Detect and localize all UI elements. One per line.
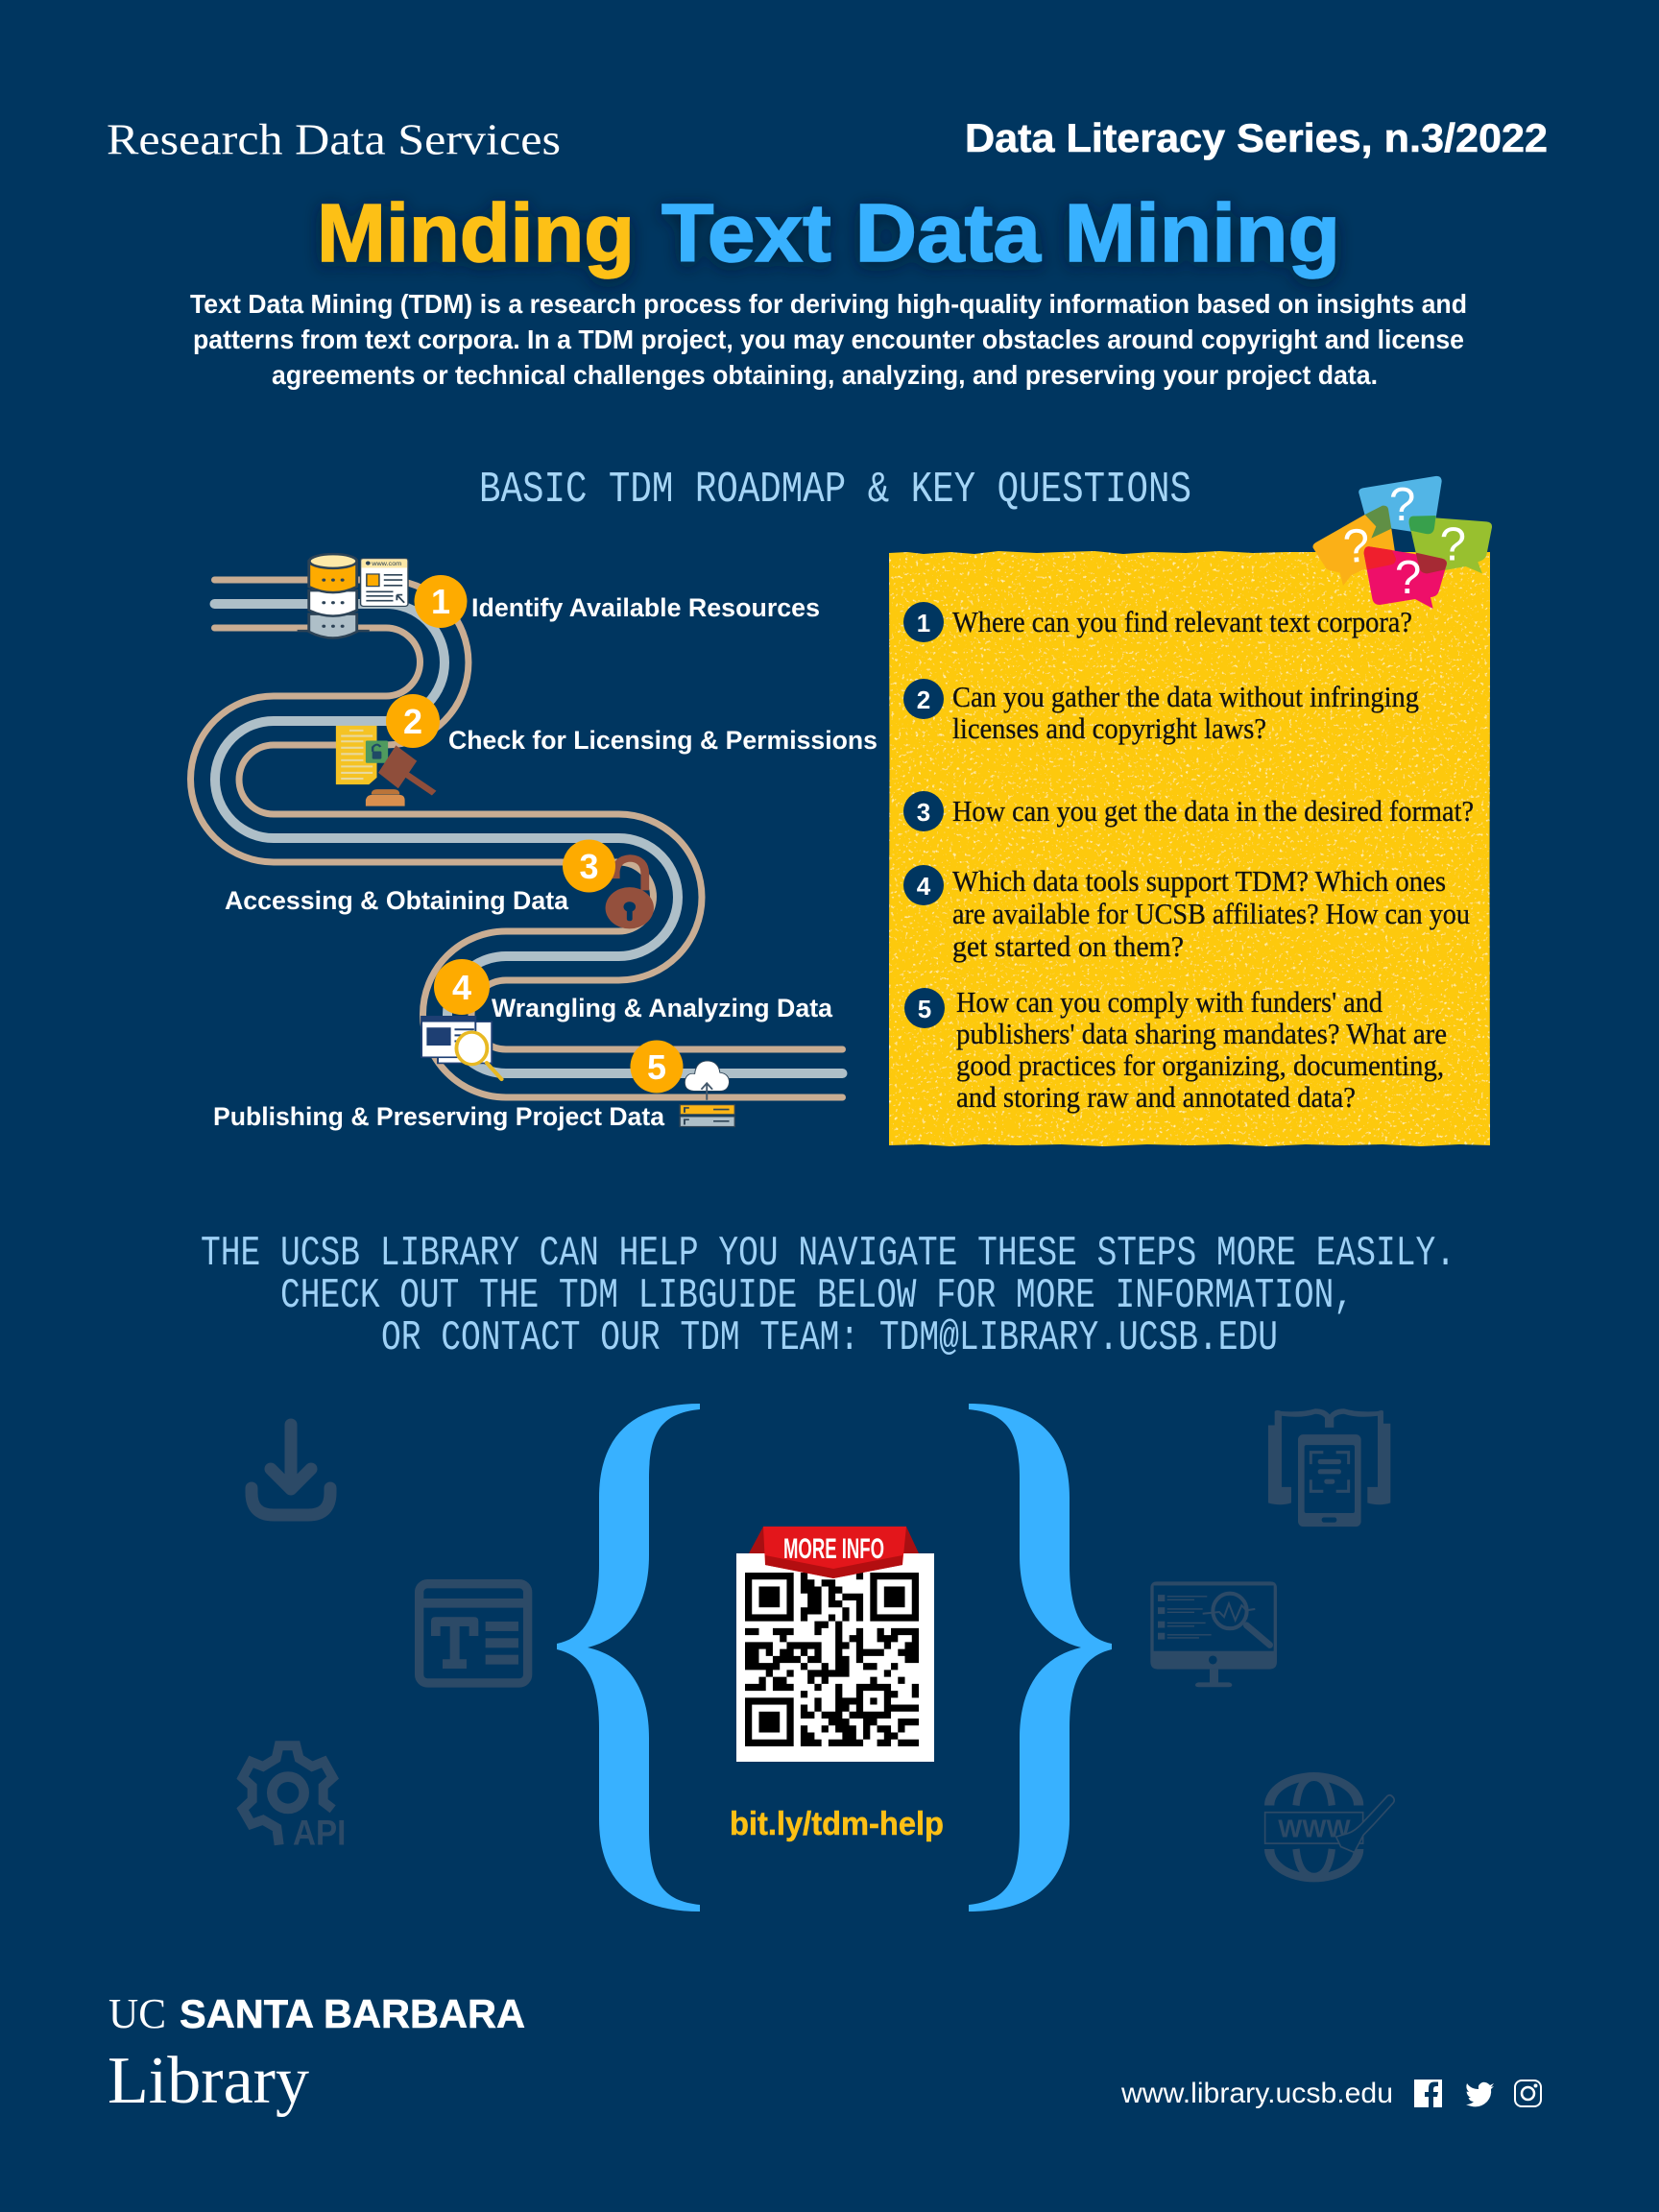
- icon: twitter: [1466, 2082, 1494, 2106]
- call to action text: [201, 1230, 1455, 1362]
- icon: web page: [361, 559, 408, 606]
- icon: API gear: API: [293, 1814, 346, 1853]
- question 5: How can you comply with funders' and: [956, 985, 1382, 1019]
- footer website: www.library.ucsb.edu: [1120, 2078, 1393, 2109]
- ribbon: more info: [749, 1527, 919, 1578]
- panel: key questions: [889, 551, 1490, 1146]
- icon: database: [298, 554, 370, 637]
- icon: globe with www and pen: [1264, 1772, 1394, 1882]
- question 4: get started on them?: [952, 929, 1184, 963]
- overlap: orange and blue: [1365, 506, 1391, 539]
- question 4: are available for UCSB affiliates? How can you: [952, 897, 1470, 930]
- icon: instagram: [1515, 2080, 1541, 2106]
- question 2: [903, 679, 1419, 745]
- header right: series label: Data Literacy Series, n.3/2022: [965, 115, 1548, 160]
- icon: monitor with magnifier: [1150, 1581, 1277, 1687]
- right curly brace: [969, 1404, 1112, 1911]
- intro paragraph: Text Data Mining (TDM) is a research process for deriving high-quality information based on insights and: [190, 289, 1467, 319]
- overlap: blue and green: [1409, 516, 1436, 534]
- left curly brace: [557, 1404, 700, 1911]
- card background: [736, 1553, 934, 1762]
- icon: facebook: [1414, 2080, 1442, 2107]
- question 2: licenses and copyright laws?: [952, 711, 1266, 745]
- question marks: ?: [1395, 551, 1421, 604]
- question 5: good practices for organizing, documenting,: [956, 1048, 1444, 1082]
- step marker 1: [415, 575, 467, 628]
- road line: centre grey: [215, 604, 843, 1073]
- step marker 2: 2: [403, 702, 422, 741]
- bubble: green: [1409, 517, 1492, 573]
- question marks: [1341, 478, 1466, 604]
- icon: windows and magnifier: [421, 1017, 501, 1079]
- step marker 3: 3: [579, 847, 599, 886]
- question 4: Which data tools support TDM? Which ones: [952, 864, 1446, 898]
- step labels: Accessing & Obtaining Data: [225, 886, 569, 915]
- step marker 5: [630, 1041, 684, 1093]
- step marker 3: [563, 839, 615, 893]
- icon: book and phone: [1268, 1408, 1390, 1527]
- question 5: publishers' data sharing mandates? What are: [956, 1017, 1447, 1050]
- ribbon: more info: MORE INFO: [783, 1533, 884, 1565]
- overlap: green and pink: [1416, 553, 1447, 573]
- yellow textured paper: [889, 551, 1490, 1146]
- icon: open padlock: [606, 858, 654, 928]
- intro paragraph: patterns from text corpora. In a TDM project, you may encounter obstacles around copyright and license: [193, 325, 1464, 354]
- icon: globe with www and pen: WWW: [1278, 1815, 1351, 1843]
- question 4: [903, 864, 1470, 963]
- step marker 4: [434, 959, 490, 1015]
- question 2: Can you gather the data without infringing: [952, 680, 1419, 713]
- question 3: How can you get the data in the desired format?: [952, 794, 1474, 828]
- question marks: ?: [1389, 478, 1415, 531]
- bubble: pink: [1364, 546, 1447, 609]
- question 2: 2: [917, 685, 930, 714]
- question 1: Where can you find relevant text corpora?: [952, 605, 1412, 638]
- question 1: 1: [917, 609, 930, 637]
- question 4: 4: [917, 872, 931, 901]
- step labels: Wrangling & Analyzing Data: [492, 994, 833, 1022]
- section heading: roadmap: BASIC TDM ROADMAP & KEY QUESTIONS: [479, 466, 1191, 515]
- question marks: ?: [1341, 518, 1371, 573]
- icon: download: [252, 1425, 330, 1515]
- icon: web page: www.com: [371, 561, 402, 567]
- icon: licensing document and gavel: [336, 726, 434, 806]
- footer logo: UC Santa Barbara Library: [108, 1990, 525, 2118]
- step labels: Publishing & Preserving Project Data: [213, 1102, 665, 1131]
- step marker 1: 1: [431, 582, 450, 621]
- icon: API gear: [243, 1745, 346, 1853]
- roadmap: winding road: [190, 580, 843, 1097]
- call to action text: OR CONTACT OUR TDM TEAM: TDM@LIBRARY.UCSB.EDU: [381, 1314, 1278, 1362]
- bubble: orange: [1312, 515, 1396, 586]
- intro paragraph: [190, 289, 1467, 390]
- icon: question speech bubbles: [1312, 476, 1492, 609]
- footer logo: UC Santa Barbara Library: Library: [108, 2044, 309, 2118]
- overlap: orange and pink: [1364, 546, 1396, 569]
- title word: Minding: Minding: [317, 188, 635, 279]
- icon: text window: [420, 1584, 528, 1683]
- question 5: 5: [918, 995, 931, 1023]
- step marker 5: 5: [647, 1047, 666, 1087]
- step labels: Check for Licensing & Permissions: [448, 726, 878, 755]
- QR code card: [736, 1527, 934, 1762]
- question 5: [904, 985, 1447, 1114]
- short link: bit.ly/tdm-help: [730, 1806, 944, 1842]
- step marker 2: [386, 694, 440, 748]
- icon: cloud upload and server: [680, 1061, 734, 1127]
- title words: Text Data Mining: Text Data Mining: [661, 188, 1340, 279]
- question 3: 3: [917, 798, 930, 827]
- question 5: and storing raw and annotated data?: [956, 1080, 1356, 1114]
- step labels: Identify Available Resources: [471, 593, 820, 622]
- QR pattern: [745, 1573, 919, 1746]
- header left: Research Data Services: Research Data Services: [107, 115, 561, 163]
- road line: outer beige: [215, 580, 843, 1049]
- footer logo: UC Santa Barbara Library: SANTA BARBARA: [180, 1991, 525, 2036]
- bubble: blue: [1358, 476, 1442, 534]
- roadmap icons: [298, 554, 734, 1127]
- title: [317, 188, 1340, 279]
- step labels: [213, 593, 878, 1131]
- call to action text: CHECK OUT THE TDM LIBGUIDE BELOW FOR MORE INFORMATION,: [280, 1272, 1354, 1320]
- intro paragraph: agreements or technical challenges obtaining, analyzing, and preserving your project data.: [272, 360, 1378, 390]
- footer logo: UC Santa Barbara Library: UC: [108, 1990, 166, 2037]
- step marker 4: 4: [452, 968, 471, 1007]
- question marks: ?: [1440, 517, 1466, 570]
- road line: inner beige: [190, 628, 843, 1097]
